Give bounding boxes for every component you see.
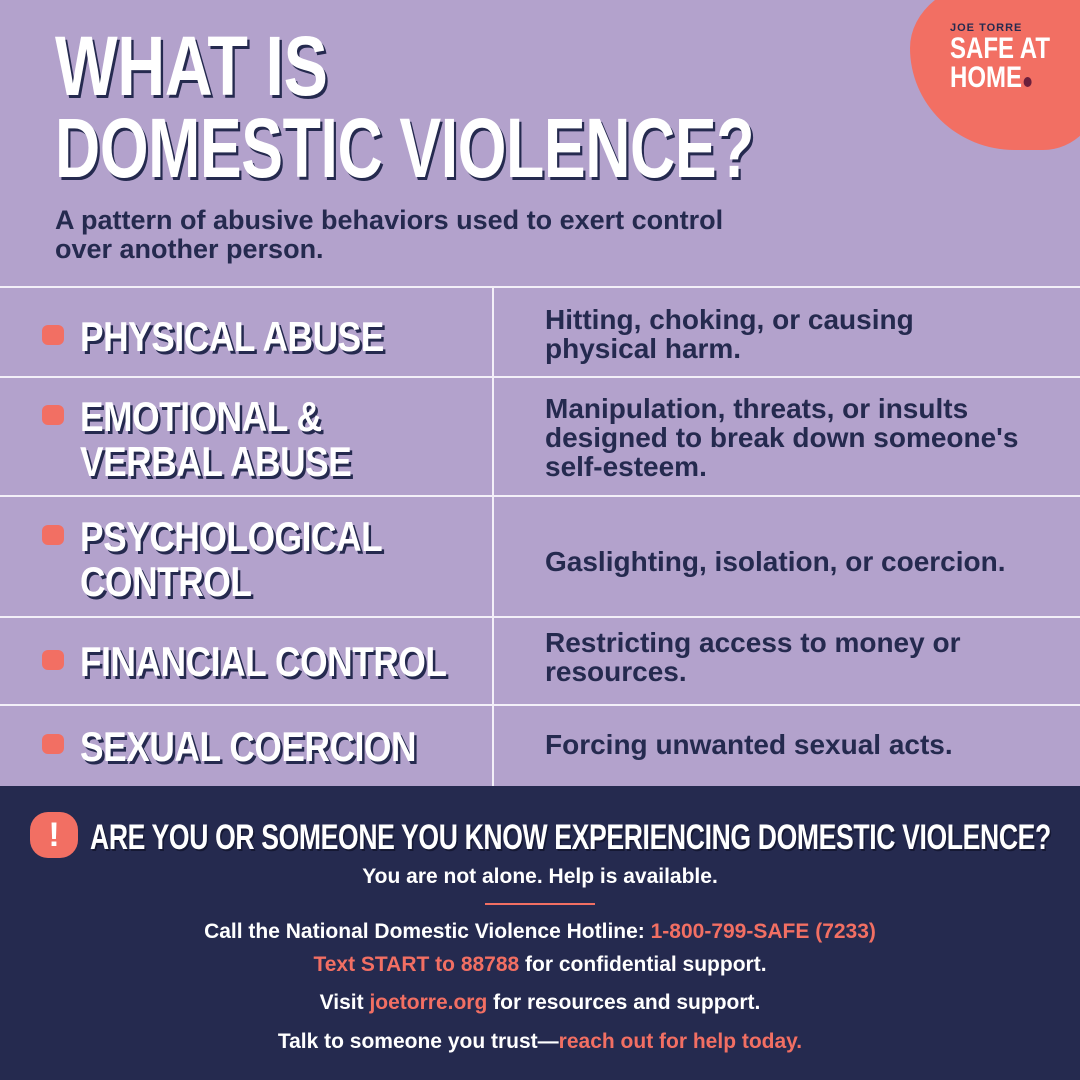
icon: alert: ! (48, 816, 60, 854)
row: psychological (42, 513, 1006, 605)
row: psychological: PSYCHOLOGICAL (80, 513, 382, 560)
row: sexual: SEXUAL COERCION (80, 723, 416, 770)
icon: alert (30, 812, 78, 858)
row: financial: FINANCIAL CONTROL (80, 638, 447, 685)
subtitle: over another person. (55, 234, 324, 264)
logo text: JOE TORRE (950, 22, 1022, 34)
row: physical abuse (42, 304, 914, 364)
logo text: HOME (950, 61, 1022, 94)
tagline: You are not alone. Help is available. (362, 865, 718, 888)
row: emotional: self-esteem. (545, 451, 707, 482)
row: physical abuse: Hitting, choking, or causing (545, 304, 914, 335)
logo blob (910, 0, 1080, 150)
footer panel (0, 786, 1080, 1080)
title (55, 19, 754, 195)
row: emotional: EMOTIONAL & (80, 393, 322, 440)
subtitle (55, 205, 723, 264)
row: sexual (42, 723, 953, 770)
title: DOMESTIC VIOLENCE? (55, 101, 754, 195)
footer heading: ARE YOU OR SOMEONE YOU KNOW EXPERIENCING DOMESTIC VIOLENCE? (90, 818, 1051, 857)
help lines: Call the National Domestic Violence Hotline: 1-800-799-SAFE (7233) (204, 920, 876, 943)
row: physical abuse: physical harm. (545, 333, 741, 364)
help lines (204, 920, 876, 1053)
title: WHAT IS (55, 19, 327, 113)
row: financial (42, 627, 960, 687)
row: sexual: Forcing unwanted sexual acts. (545, 729, 953, 760)
row: emotional: Manipulation, threats, or insults (545, 393, 968, 424)
help lines: Text START to 88788 for confidential support. (313, 953, 767, 976)
help lines: Visit joetorre.org for resources and support. (320, 991, 760, 1014)
help lines: Talk to someone you trust—reach out for help today. (278, 1030, 802, 1053)
row: emotional (42, 393, 1018, 485)
subtitle: A pattern of abusive behaviors used to exert control (55, 205, 723, 235)
row: physical abuse: PHYSICAL ABUSE (80, 313, 384, 360)
row: financial: resources. (545, 656, 687, 687)
logo text (950, 22, 1050, 94)
row: psychological: CONTROL (80, 558, 251, 605)
logo text: SAFE AT (950, 32, 1050, 65)
row: emotional: VERBAL ABUSE (80, 438, 351, 485)
row: emotional: designed to break down someone's (545, 422, 1018, 453)
row: financial: Restricting access to money or (545, 627, 960, 658)
row: psychological: Gaslighting, isolation, or coercion. (545, 546, 1006, 577)
